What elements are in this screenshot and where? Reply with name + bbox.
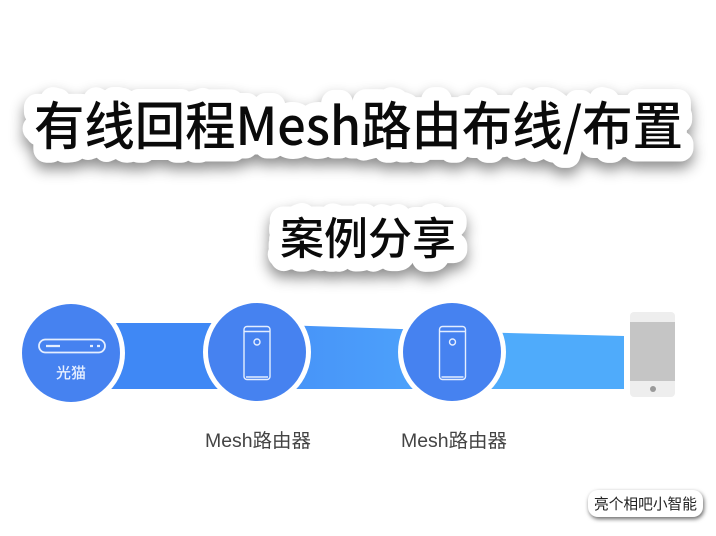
label: modem: 光猫 (56, 362, 86, 383)
node: modem (17, 299, 125, 407)
watermark badge: 亮个相吧小智能 (594, 495, 697, 513)
label: router 1: Mesh路由器 (205, 430, 311, 452)
watermark badge (588, 490, 703, 517)
subtitle: 案例分享 (280, 203, 456, 267)
icon: router 2 (440, 326, 466, 380)
band: router 1 to router 2 (280, 325, 430, 389)
label: router 2: Mesh路由器 (401, 430, 507, 452)
icon: phone (630, 312, 675, 397)
node: router 2 (398, 298, 506, 406)
title: 有线回程Mesh路由布线/布置 (34, 85, 683, 160)
icon: modem (39, 340, 105, 352)
node: router 1 (203, 298, 311, 406)
band: modem to router 1 (100, 323, 240, 389)
icon: router 1 (244, 326, 270, 380)
band: router 2 to phone (470, 332, 624, 389)
